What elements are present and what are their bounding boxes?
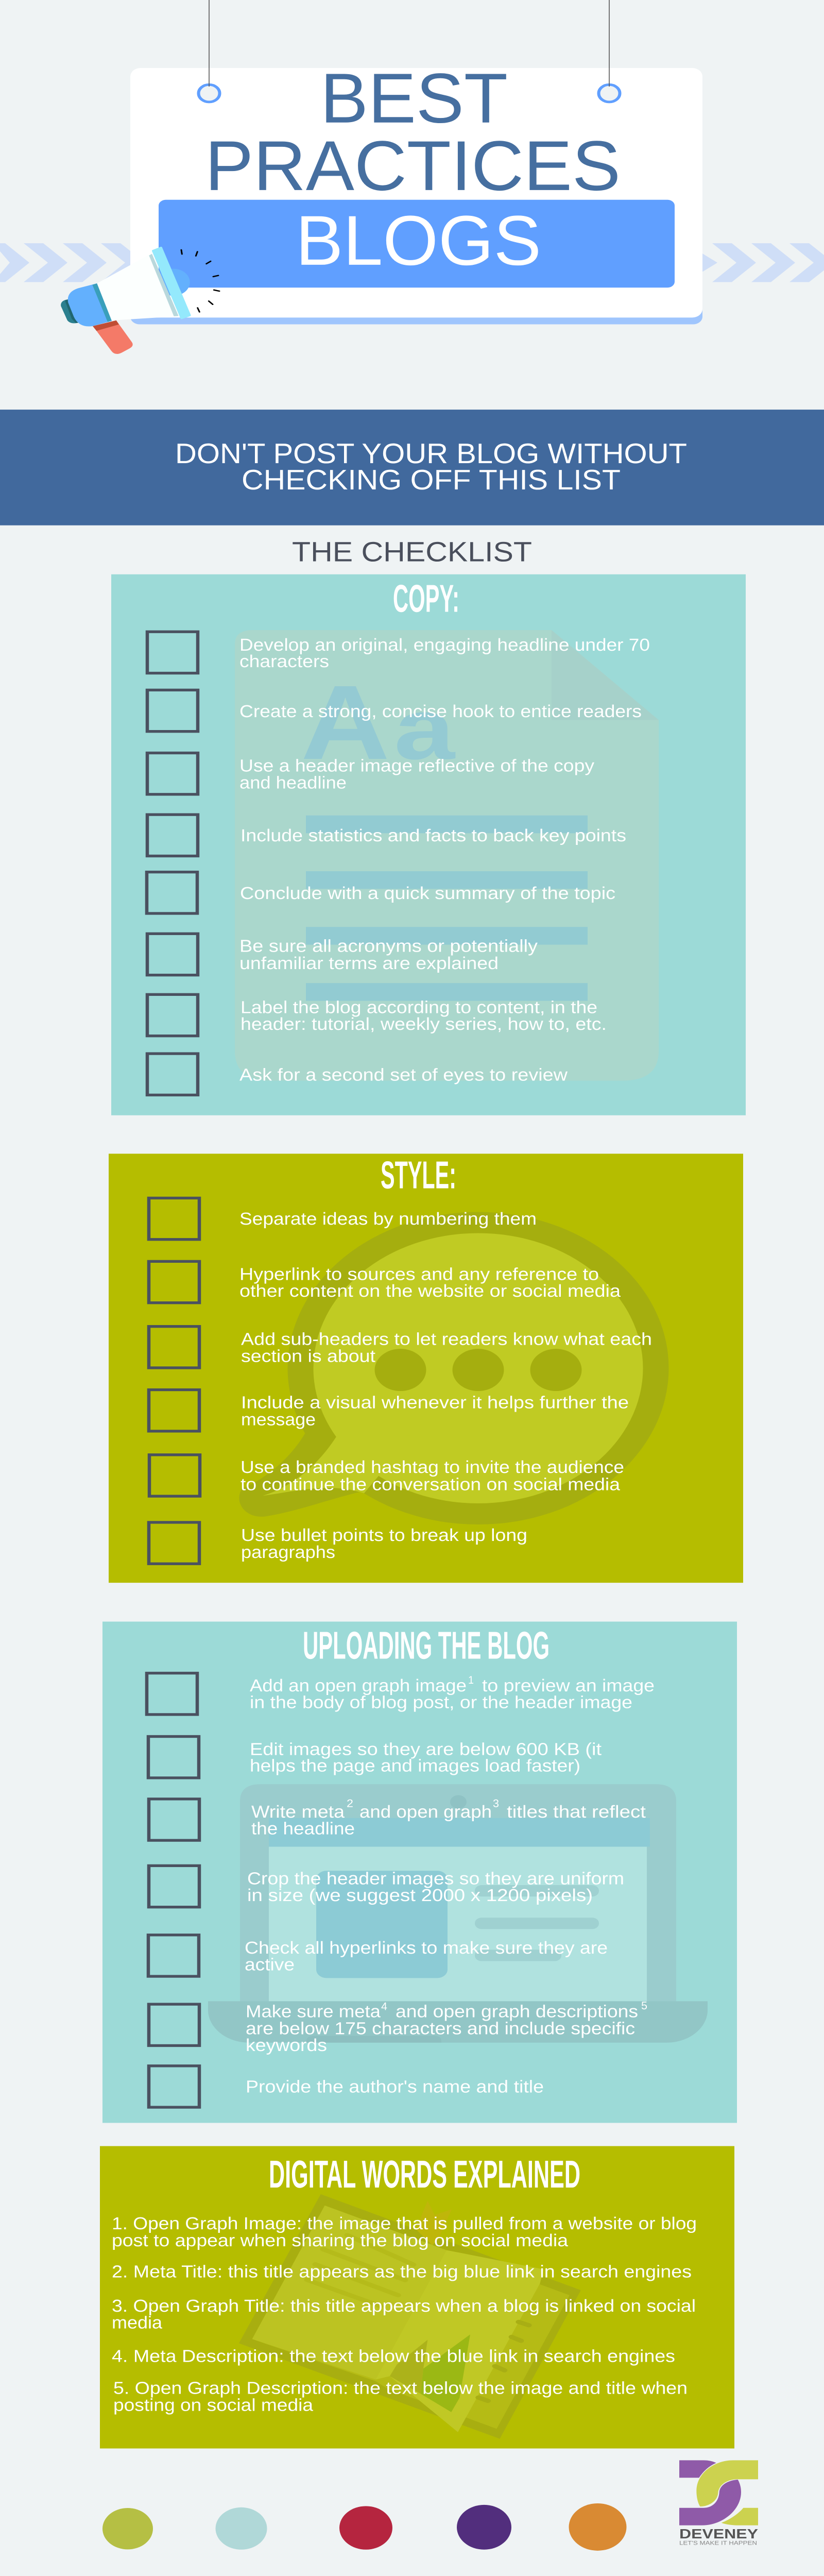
definition 1: post to appear when sharing the blog on social media (112, 2231, 568, 2250)
definition 3: 3. Open Graph Title: this title appears when a blog is linked on social (112, 2296, 696, 2315)
logo: deveney: LET'S MAKE IT HAPPEN (679, 2540, 757, 2546)
checklist item: 5 (641, 1999, 647, 2012)
checklist item: header: tutorial, weekly series, how to, etc. (241, 1014, 607, 1034)
checklist item: Add an open graph image (250, 1675, 467, 1695)
definition 5: 5. Open Graph Description: the text below the image and title when (113, 2378, 688, 2398)
icon: open book background (239, 2194, 581, 2439)
checklist item (149, 1198, 537, 1240)
checklist item (147, 994, 607, 1036)
logo: deveney: DEVENEY (679, 2526, 758, 2541)
logo: deveney (679, 2460, 758, 2546)
checklist item (149, 1866, 624, 1907)
checklist item: Make sure meta (246, 2002, 381, 2021)
panel: style (109, 1154, 743, 1583)
checklist item: Add sub-headers to let readers know what each (241, 1329, 652, 1349)
checklist item: Include a visual whenever it helps further the (241, 1393, 629, 1412)
checklist item (148, 1736, 602, 1778)
checklist item (149, 1999, 647, 2055)
checklist item: other content on the website or social media (239, 1281, 621, 1301)
checklist item: and open graph (359, 1802, 492, 1821)
checklist item (147, 690, 642, 732)
icon: speech bubble background (239, 1212, 668, 1524)
checklist item: and headline (239, 773, 347, 792)
subtitle band: CHECKING OFF THIS LIST (242, 464, 621, 496)
hero section (0, 0, 824, 354)
checklist item: Be sure all acronyms or potentially (239, 936, 538, 956)
blogs banner: BLOGS (296, 201, 541, 280)
checklist item: the headline (251, 1819, 355, 1838)
checklist item: are below 175 characters and include specific (246, 2019, 635, 2038)
checklist item (147, 934, 538, 975)
icon: document background: A (301, 664, 390, 781)
checklist item (147, 872, 615, 913)
definition 3: media (112, 2313, 162, 2332)
checklist item: 2 (347, 1797, 353, 1809)
checklist item (149, 1390, 629, 1431)
heading: the checklist: THE CHECKLIST (292, 536, 532, 567)
checklist item: Use a header image reflective of the copy (239, 756, 594, 775)
definition 1 (112, 2214, 697, 2250)
checklist item: Edit images so they are below 600 KB (it (250, 1739, 602, 1759)
title: best practices (205, 59, 621, 205)
title: best practices: PRACTICES (205, 127, 621, 205)
definition 3 (112, 2296, 696, 2332)
checklist item: 1 (468, 1673, 474, 1686)
checklist item: in the body of blog post, or the header image (250, 1692, 632, 1712)
checklist item: Separate ideas by numbering them (239, 1209, 537, 1228)
checklist item (147, 1673, 655, 1715)
checklist item (149, 1261, 621, 1303)
subtitle band (0, 410, 824, 526)
checklist item: Create a strong, concise hook to entice readers (239, 701, 642, 721)
definition 2: 2. Meta Title: this title appears as the big blue link in search engines (112, 2262, 692, 2281)
checklist item: Provide the author's name and title (246, 2077, 544, 2096)
checklist item: helps the page and images load faster) (250, 1756, 580, 1775)
checklist item: keywords (246, 2036, 327, 2055)
icon: document background: a (394, 681, 456, 777)
checklist item: Ask for a second set of eyes to review (239, 1065, 568, 1084)
checklist item: active (245, 1955, 295, 1974)
chevron band (0, 243, 824, 282)
checklist item: section is about (241, 1346, 376, 1366)
checklist item: to continue the conversation on social media (241, 1475, 620, 1494)
definition 1: 1. Open Graph Image: the image that is pulled from a website or blog (112, 2214, 697, 2233)
icon: laptop background (208, 1784, 708, 2043)
brand colour dots (102, 2503, 626, 2551)
definition 4: 4. Meta Description: the text below the blue link in search engines (112, 2346, 675, 2366)
checklist item (149, 1522, 527, 1564)
icon: megaphone (61, 248, 219, 354)
checklist item: Write meta (251, 1802, 345, 1821)
checklist item (147, 753, 594, 794)
subtitle band: DON'T POST YOUR BLOG WITHOUT (175, 438, 687, 469)
checklist item: and open graph descriptions (396, 2002, 638, 2021)
checklist item: Hyperlink to sources and any reference to (239, 1264, 599, 1284)
checklist item: in size (we suggest 2000 x 1200 pixels) (247, 1886, 593, 1905)
panel: style: STYLE: (381, 1154, 456, 1197)
checklist item (149, 1797, 646, 1840)
checklist item: to preview an image (482, 1675, 655, 1695)
panel: uploading the blog (102, 1622, 737, 2123)
checklist item: Crop the header images so they are uniform (247, 1869, 624, 1888)
panel: copy (111, 574, 746, 1115)
sign card (130, 68, 702, 325)
checklist item: Develop an original, engaging headline under 70 (239, 635, 650, 654)
panel: digital words explained (100, 2146, 734, 2448)
blogs banner (159, 200, 675, 287)
checklist item: Conclude with a quick summary of the topic (240, 884, 615, 903)
checklist item: unfamiliar terms are explained (239, 954, 499, 973)
checklist item: 3 (493, 1797, 499, 1809)
checklist item: 4 (381, 2000, 387, 2013)
icon: document background (235, 630, 659, 1081)
hanging ring right (598, 0, 620, 102)
checklist item (149, 2066, 544, 2107)
checklist item (147, 815, 626, 856)
hanging ring left (199, 0, 219, 102)
panel: copy: COPY: (393, 577, 459, 620)
checklist item: Label the blog according to content, in the (241, 997, 597, 1017)
definition 5 (113, 2378, 688, 2415)
checklist item (147, 1054, 568, 1095)
checklist item: paragraphs (241, 1542, 335, 1562)
checklist item: Use a branded hashtag to invite the audience (241, 1458, 624, 1477)
checklist item: Check all hyperlinks to make sure they are (245, 1938, 608, 1957)
checklist item (147, 632, 650, 673)
checklist item: Include statistics and facts to back key points (241, 825, 626, 845)
checklist item (148, 1935, 608, 1976)
checklist item: message (241, 1410, 316, 1429)
title: best practices: BEST (320, 59, 508, 138)
checklist item: characters (239, 652, 329, 671)
checklist item: titles that reflect (507, 1802, 646, 1821)
checklist item (149, 1327, 652, 1368)
checklist item: Use bullet points to break up long (241, 1526, 527, 1545)
checklist item (149, 1455, 624, 1496)
definition 5: posting on social media (113, 2395, 313, 2415)
